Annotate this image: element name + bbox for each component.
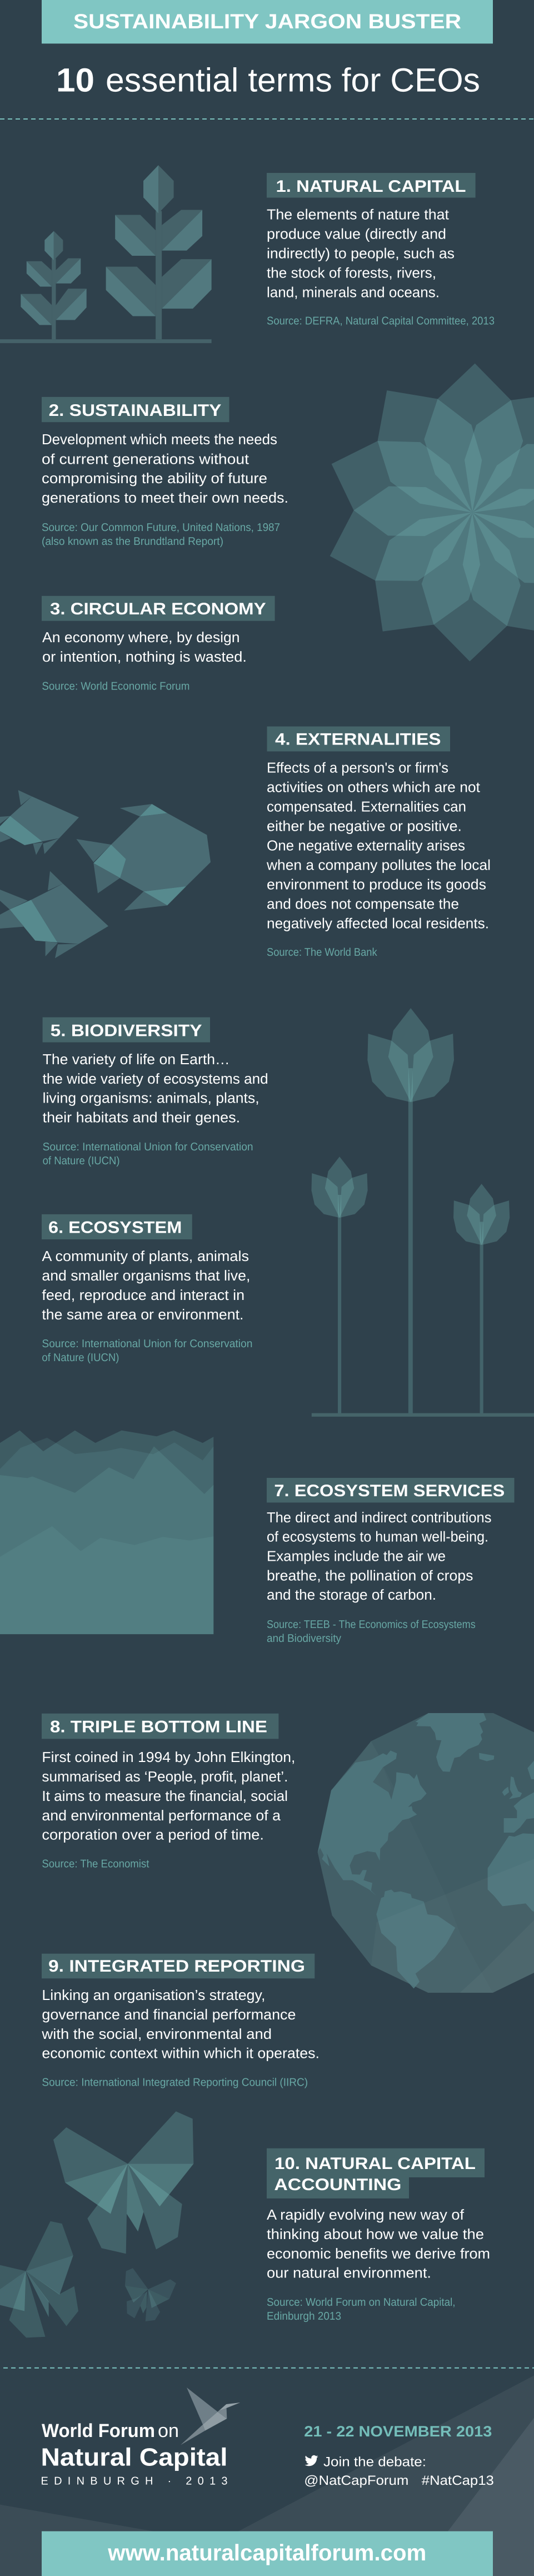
- panel: externalities: Effects of a person's or firm's: [267, 759, 448, 776]
- panel: integrated reporting: with the social, environmental and: [41, 2026, 272, 2042]
- logo: World Forum on Natural Capital: EDINBURGH · 2013: [41, 2475, 228, 2488]
- panel: natural capital accounting: 10. NATURAL CAPITAL: [275, 2155, 476, 2173]
- panel: sustainability: Source: Our Common Future, United Nations, 1987: [42, 522, 280, 534]
- panel: biodiversity: living organisms: animals, plants,: [43, 1090, 259, 1106]
- panel: natural capital accounting: A rapidly evolving new way of: [267, 2206, 465, 2223]
- panel: externalities: environment to produce its goods: [267, 876, 486, 892]
- panel: natural capital accounting: [267, 2148, 490, 2322]
- logo: World Forum on Natural Capital: Natural Capital: [41, 2443, 228, 2471]
- panel: integrated reporting: economic context within which it operates.: [42, 2045, 320, 2062]
- icon: twitter bird: [305, 2455, 318, 2466]
- panel: ecosystem services: 7. ECOSYSTEM SERVICES: [274, 1482, 505, 1500]
- panel: circular economy: or intention, nothing is wasted.: [42, 648, 247, 665]
- icon: origami bird: [181, 2388, 240, 2445]
- panel: ecosystem: A community of plants, animals: [42, 1248, 249, 1264]
- title: essential terms for CEOs: [106, 61, 480, 99]
- panel: sustainability: [42, 397, 288, 548]
- panel: triple bottom line: First coined in 1994 by John Elkington,: [42, 1749, 295, 1765]
- panel: triple bottom line: corporation over a period of time.: [42, 1826, 264, 1843]
- panel: integrated reporting: 9. INTEGRATED REPORTING: [48, 1957, 305, 1976]
- logo: World Forum on Natural Capital: World Forum: [42, 2420, 155, 2441]
- panel: integrated reporting: Linking an organisation’s strategy,: [42, 1987, 265, 2003]
- butterfly: large: [53, 2111, 193, 2254]
- panel: ecosystem services: and Biodiversity: [267, 1632, 341, 1645]
- logo: World Forum on Natural Capital: [41, 2388, 240, 2488]
- panel: natural capital: land, minerals and oceans.: [267, 284, 440, 300]
- panel: biodiversity: the wide variety of ecosystems and: [43, 1070, 268, 1087]
- panel: ecosystem: and smaller organisms that live,: [42, 1267, 250, 1284]
- icon: fish: [0, 790, 211, 958]
- panel: natural capital accounting: our natural environment.: [267, 2265, 431, 2281]
- icon: globe: [318, 1713, 534, 1993]
- panel: biodiversity: of Nature (IUCN): [43, 1155, 120, 1167]
- panel: externalities: 4. EXTERNALITIES: [275, 731, 441, 749]
- panel: triple bottom line: and environmental performance of a: [42, 1807, 281, 1824]
- event date and social: #NatCap13: [422, 2473, 494, 2488]
- butterfly: left: [0, 2221, 78, 2337]
- panel: ecosystem: 6. ECOSYSTEM: [48, 1218, 182, 1237]
- header banner: [42, 0, 493, 43]
- panel: sustainability: generations to meet their own needs.: [42, 489, 288, 506]
- header banner: SUSTAINABILITY JARGON BUSTER: [73, 10, 461, 33]
- panel: ecosystem services: of ecosystems to human well-being.: [267, 1528, 488, 1545]
- panel: biodiversity: The variety of life on Earth…: [43, 1051, 230, 1068]
- icon: butterflies: [0, 2111, 193, 2337]
- panel: integrated reporting: governance and financial performance: [42, 2006, 296, 2023]
- panel: natural capital: The elements of nature that: [267, 206, 450, 223]
- panel: ecosystem services: Source: TEEB - The Economics of Ecosystems: [267, 1619, 476, 1631]
- logo: World Forum on Natural Capital: on: [158, 2420, 179, 2441]
- panel: sustainability: 2. SUSTAINABILITY: [49, 401, 221, 420]
- panel: externalities: when a company pollutes the local: [266, 856, 491, 873]
- panel: natural capital accounting: ACCOUNTING: [274, 2176, 401, 2194]
- panel: ecosystem services: and the storage of carbon.: [267, 1586, 436, 1603]
- panel: natural capital accounting: Edinburgh 2013: [267, 2310, 341, 2322]
- panel: sustainability: compromising the ability of future: [42, 470, 267, 487]
- panel: natural capital: the stock of forests, rivers,: [267, 264, 436, 281]
- panel: externalities: either be negative or positive.: [267, 817, 462, 834]
- panel: externalities: Source: The World Bank: [267, 946, 378, 959]
- panel: ecosystem services: [267, 1478, 515, 1645]
- panel: triple bottom line: 8. TRIPLE BOTTOM LINE: [50, 1718, 267, 1736]
- butterfly: small: [125, 2268, 176, 2321]
- icon: mountains: [0, 1431, 213, 1634]
- title: 10: [56, 61, 94, 99]
- icon: flowers: [311, 1008, 534, 1417]
- event date and social: @NatCapForum: [304, 2473, 408, 2488]
- footer banner: www.naturalcapitalforum.com: [107, 2540, 426, 2565]
- icon: plants: [0, 165, 212, 343]
- panel: ecosystem: feed, reproduce and interact in: [42, 1287, 244, 1303]
- panel: sustainability: (also known as the Brundtland Report): [42, 535, 223, 548]
- panel: natural capital accounting: Source: World Forum on Natural Capital,: [267, 2296, 456, 2309]
- panel: externalities: compensated. Externalities can: [267, 798, 466, 815]
- panel: circular economy: 3. CIRCULAR ECONOMY: [50, 600, 266, 618]
- panel: natural capital accounting: thinking about how we value the: [267, 2226, 484, 2242]
- panel: externalities: One negative externality arises: [267, 837, 465, 853]
- panel: sustainability: Development which meets the needs: [42, 431, 277, 448]
- panel: triple bottom line: summarised as ‘People, profit, planet’.: [42, 1768, 288, 1785]
- panel: biodiversity: their habitats and their genes.: [43, 1109, 240, 1126]
- panel: natural capital: Source: DEFRA, Natural Capital Committee, 2013: [267, 315, 495, 327]
- panel: externalities: activities on others which are not: [267, 778, 481, 795]
- event date and social: [304, 2423, 494, 2488]
- icon: flower: [313, 360, 534, 665]
- panel: integrated reporting: Source: International Integrated Reporting Council (IIRC): [42, 2077, 308, 2089]
- panel: biodiversity: [43, 1018, 268, 1167]
- panel: ecosystem services: The direct and indirect contributions: [267, 1509, 491, 1526]
- panel: natural capital: 1. NATURAL CAPITAL: [276, 177, 466, 196]
- panel: circular economy: [42, 596, 275, 692]
- panel: ecosystem: the same area or environment.: [42, 1306, 243, 1323]
- panel: triple bottom line: [42, 1714, 295, 1870]
- panel: triple bottom line: It aims to measure the financial, social: [42, 1788, 288, 1804]
- panel: ecosystem: Source: International Union for Conservation: [42, 1338, 252, 1350]
- panel: sustainability: of current generations without: [42, 450, 249, 467]
- footer banner: [42, 2531, 493, 2576]
- panel: triple bottom line: Source: The Economist: [42, 1858, 149, 1870]
- panel: ecosystem services: breathe, the pollination of crops: [267, 1567, 473, 1584]
- panel: ecosystem services: Examples include the air we: [267, 1548, 446, 1565]
- panel: natural capital: produce value (directly and: [267, 226, 446, 242]
- panel: circular economy: An economy where, by design: [42, 629, 240, 646]
- event date and social: Join the debate:: [323, 2454, 426, 2470]
- panel: ecosystem: of Nature (IUCN): [42, 1352, 119, 1364]
- panel: externalities: and does not compensate the: [267, 895, 459, 912]
- panel: externalities: negatively affected local residents.: [267, 915, 489, 931]
- panel: biodiversity: 5. BIODIVERSITY: [51, 1022, 202, 1040]
- footer background shapes: [0, 2375, 534, 2576]
- panel: circular economy: Source: World Economic Forum: [42, 680, 189, 692]
- panel: integrated reporting: [41, 1954, 320, 2089]
- panel: natural capital: indirectly) to people, such as: [267, 245, 455, 261]
- panel: biodiversity: Source: International Union for Conservation: [43, 1141, 253, 1153]
- panel: natural capital: [267, 173, 495, 327]
- panel: ecosystem: [42, 1214, 252, 1364]
- panel: natural capital accounting: economic benefits we derive from: [267, 2245, 490, 2262]
- event date and social: 21 - 22 NOVEMBER 2013: [304, 2423, 492, 2440]
- panel: externalities: [266, 726, 491, 959]
